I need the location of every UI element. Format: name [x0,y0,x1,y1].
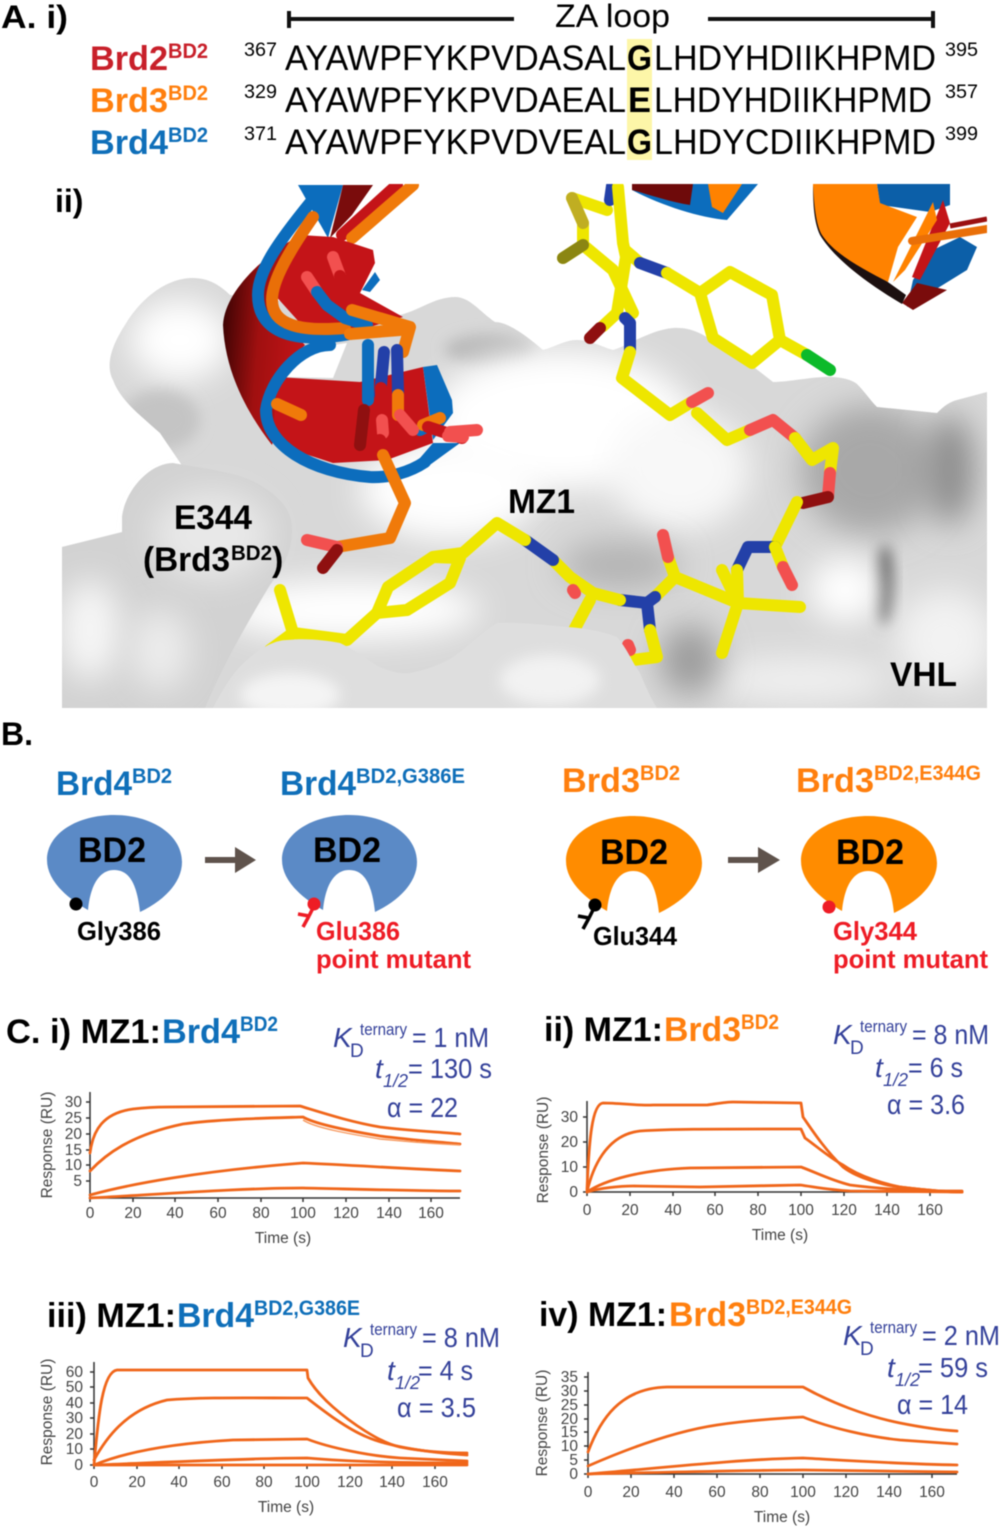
chart i: sensorgram Brd4 BD2: 20 [124,1205,142,1222]
heading: C. i) MZ1:Brd4 BD2: BD2 [240,1013,278,1036]
label: E344 (Brd3 BD2) [143,499,283,579]
panel: Brd3 BD2 E344G mutant: BD2 [836,833,904,872]
stats: chart i [333,1020,492,1123]
sequence row: Brd4: BD2 [168,124,208,147]
heading: iii) MZ1:Brd4 BD2,G386E [47,1297,360,1335]
stats: chart iv: t [887,1352,896,1383]
stats: chart i: = 130 s [408,1053,492,1084]
chart i: sensorgram Brd4 BD2: 25 [65,1110,82,1127]
label: VHL: VHL [890,656,957,694]
sequence row: Brd4 [90,123,978,162]
chart iii: sensorgram Brd4 G386E: 80 [255,1474,273,1491]
chart i: sensorgram Brd4 BD2: 120 [333,1205,359,1222]
panel: Brd4 BD2 wild type: Brd4 [56,765,132,803]
chart iii: sensorgram Brd4 G386E: 20 [66,1426,83,1443]
heading: ii) MZ1:Brd3 BD2: BD2 [741,1011,779,1034]
panel: crystal structure of MZ1 ternary complex [60,184,995,717]
label: MZ1: MZ1 [508,483,575,521]
chart iii: sensorgram Brd4 G386E: 0 [74,1457,83,1474]
chart i: sensorgram Brd4 BD2: 5 [73,1173,82,1190]
chart iv: sensorgram Brd3 E344G: 120 [833,1484,859,1501]
stats: chart iii: D [360,1341,374,1362]
chart ii: sensorgram Brd3 BD2: 20 [561,1134,578,1151]
panel: Brd4 BD2 G386E mutant [280,765,471,974]
panel label: ii): ii) [55,183,83,219]
heading: iv) MZ1:Brd3 BD2,E344G: iv) MZ1: [539,1296,667,1334]
chart iv: sensorgram Brd3 E344G: 0 [584,1484,593,1501]
chart i: sensorgram Brd4 BD2: 160 [418,1205,444,1222]
stats: chart iv: α = 14 [897,1389,968,1420]
chart iv: sensorgram Brd3 E344G: 60 [708,1484,726,1501]
stats: chart i: t [375,1053,384,1084]
chart iv: sensorgram Brd3 E344G: 0 [569,1466,578,1483]
panel: Brd4 BD2 G386E mutant: BD2 [313,831,381,870]
chart ii: sensorgram Brd3 BD2: Response (RU) [535,1097,552,1203]
panel: Brd3 BD2 wild type: Brd3 [562,762,640,800]
chart ii: sensorgram Brd3 BD2: 140 [874,1202,900,1219]
panel: Brd4 BD2 wild type: BD2 [78,831,146,870]
E344 surface lump [62,462,276,682]
stats: chart iii: ternary [370,1320,417,1339]
sequence row: Brd3 [90,81,978,120]
chart i: sensorgram Brd4 BD2: 40 [166,1205,184,1222]
stats: chart ii: ternary [860,1017,907,1036]
panel: Brd3 BD2 wild type: BD2 [600,833,668,872]
heading: iii) MZ1:Brd4 BD2,G386E: BD2,G386E [254,1297,360,1320]
chart iii: sensorgram Brd4 G386E: 50 [66,1379,83,1396]
stats: chart iii: 1/2 [395,1373,420,1393]
heading: C. i) MZ1:Brd4 BD2: Brd4 [162,1013,240,1051]
label: E344 (Brd3 BD2): BD2 [231,542,272,565]
chart i: sensorgram Brd4 BD2: 10 [65,1157,82,1174]
label: E344 (Brd3 BD2): ) [272,541,283,579]
chart iii: sensorgram Brd4 G386E: 40 [66,1395,83,1412]
sequence row: Brd3: Brd3 [90,82,168,120]
stats: chart iii: = 4 s [418,1355,473,1386]
chart iii: sensorgram Brd4 G386E [39,1359,467,1516]
chart iv: sensorgram Brd3 E344G [534,1369,957,1526]
chart ii: sensorgram Brd3 BD2: 60 [706,1202,724,1219]
heading: iv) MZ1:Brd3 BD2,E344G: BD2,E344G [746,1296,852,1319]
chart ii: sensorgram Brd3 BD2: 160 [917,1202,943,1219]
stats: chart iii: = 8 nM [422,1322,500,1353]
sequence row: Brd2: LHDYHDIIKHPMD [654,39,936,78]
chart i: sensorgram Brd4 BD2: 60 [209,1205,227,1222]
heading: iv) MZ1:Brd3 BD2,E344G: Brd3 [669,1296,746,1334]
panel label: A. i): A. i) [1,0,68,35]
chart ii: sensorgram Brd3 BD2: 80 [749,1202,767,1219]
chart iii: sensorgram Brd4 G386E: 40 [170,1474,188,1491]
chart i: sensorgram Brd4 BD2: 30 [65,1094,82,1111]
panel: Brd4 BD2 wild type: Gly386 [77,916,161,946]
chart iv: sensorgram Brd3 E344G: 80 [751,1484,769,1501]
stats: chart ii: = 6 s [908,1052,963,1083]
chart iv: sensorgram Brd3 E344G: 20 [622,1484,640,1501]
heading: iii) MZ1:Brd4 BD2,G386E: Brd4 [177,1297,254,1335]
stats: chart iv: 1/2 [895,1370,920,1390]
chart iv: sensorgram Brd3 E344G: 20 [561,1411,578,1428]
panel: Brd3 BD2 E344G mutant: Gly344 [833,916,918,946]
chart iii: sensorgram Brd4 G386E: Response (RU) [39,1359,56,1465]
chart ii: sensorgram Brd3 BD2: 30 [561,1109,578,1126]
sequence row: Brd3: BD2 [168,82,208,105]
chart ii: sensorgram Brd3 BD2: 10 [561,1159,578,1176]
chart i: sensorgram Brd4 BD2: 100 [290,1205,316,1222]
stats: chart iv: K [843,1320,863,1351]
sequence row: Brd4: LHDYCDIIKHPMD [654,123,936,162]
chart iv: sensorgram Brd3 E344G: 160 [919,1484,945,1501]
panel: Brd3 BD2 wild type [562,762,702,951]
chart ii: sensorgram Brd3 BD2: 120 [831,1202,857,1219]
chart i: sensorgram Brd4 BD2 [39,1092,460,1247]
highlight: conserved residue column [627,39,652,160]
label: E344 (Brd3 BD2): E344 [174,499,252,537]
chart ii: sensorgram Brd3 BD2 [535,1097,962,1244]
chart i: sensorgram Brd4 BD2: 80 [252,1205,270,1222]
panel: Brd4 BD2 G386E mutant: Glu386 [316,916,400,946]
foreground surface lump [234,626,654,708]
stats: chart ii: α = 3.6 [887,1089,965,1120]
chart iii: sensorgram Brd4 G386E: 10 [66,1441,83,1458]
VHL surface [62,278,995,708]
top centre helix [632,184,758,220]
sequence row: Brd3: E [628,81,651,120]
stats: chart ii: D [850,1038,864,1059]
chart iii: sensorgram Brd4 G386E: 120 [337,1474,363,1491]
sequence row: Brd4: Brd4 [90,124,168,162]
panel: Brd3 BD2 wild type: BD2 [640,762,680,785]
sequence row: Brd3: 329 [244,82,277,103]
panel: Brd3 BD2 E344G mutant: BD2,E344G [874,762,981,785]
stats: chart iv: D [860,1339,874,1360]
chart iv: sensorgram Brd3 E344G: 140 [876,1484,902,1501]
stats: chart i: D [350,1041,364,1062]
panel: Brd3 BD2 wild type: Glu344 [593,921,678,951]
heading: iv) MZ1:Brd3 BD2,E344G [539,1296,852,1334]
arrow: Brd3 to mutant [728,847,780,873]
label: E344 (Brd3 BD2): (Brd3 [143,541,230,579]
chart ii: sensorgram Brd3 BD2: 0 [583,1202,592,1219]
chart iii: sensorgram Brd4 G386E: 160 [422,1474,448,1491]
panel: Brd4 BD2 wild type: BD2 [132,765,172,788]
panel: Brd4 BD2 wild type [47,765,182,946]
stats: chart ii [833,1017,989,1120]
chart iii: sensorgram Brd4 G386E: 0 [90,1474,99,1491]
stats: chart iv: ternary [870,1318,917,1337]
stats: chart i: = 1 nM [412,1022,489,1053]
sequence row: Brd2: BD2 [168,40,208,63]
MZ1 molecule sticks [270,186,833,660]
sequence row: Brd2: Brd2 [90,40,168,78]
chart ii: sensorgram Brd3 BD2: 20 [621,1202,639,1219]
Glu344 orange sidechain [307,455,405,568]
stats: chart iii [343,1320,500,1423]
chart iii: sensorgram Brd4 G386E: 100 [294,1474,320,1491]
sequence row: Brd2: AYAWPFYKPVDASAL [285,39,626,78]
chart iv: sensorgram Brd3 E344G: 100 [790,1484,816,1501]
chart i: sensorgram Brd4 BD2: Response (RU) [39,1092,56,1198]
arrow: Brd4 to mutant [205,847,256,873]
stats: chart i: K [333,1022,353,1053]
panel: Brd4 BD2 G386E mutant: point mutant [316,944,471,974]
heading: C. i) MZ1:Brd4 BD2 [6,1013,278,1051]
heading: C. i) MZ1:Brd4 BD2: C. i) MZ1: [6,1013,161,1051]
stats: chart iii: α = 3.5 [397,1392,476,1423]
chart iv: sensorgram Brd3 E344G: 5 [569,1452,578,1469]
chart iii: sensorgram Brd4 G386E: 30 [66,1410,83,1427]
stats: chart iv: = 59 s [918,1352,988,1383]
sequence row: Brd4: G [627,123,652,162]
panel: Brd3 BD2 E344G mutant [796,762,988,974]
chart iv: sensorgram Brd3 E344G: 25 [561,1397,578,1414]
stats: chart iii: t [387,1355,396,1386]
chart iii: sensorgram Brd4 G386E: 60 [213,1474,231,1491]
panel: Brd3 BD2 E344G mutant: Brd3 [796,762,874,800]
chart iv: sensorgram Brd3 E344G: 15 [561,1424,578,1441]
chart ii: sensorgram Brd3 BD2: 100 [788,1202,814,1219]
sequence row: Brd2: 395 [945,40,978,61]
chart iii: sensorgram Brd4 G386E: 20 [128,1474,146,1491]
sequence row: Brd3: 357 [945,82,978,103]
stats: chart iv [843,1318,1000,1420]
chart iv: sensorgram Brd3 E344G: 35 [561,1369,578,1386]
chart iv: sensorgram Brd3 E344G: 40 [665,1484,683,1501]
chart i: sensorgram Brd4 BD2: Time (s) [255,1230,311,1247]
chart iii: sensorgram Brd4 G386E: Time (s) [258,1499,314,1516]
top right helix [813,184,987,310]
heading: iii) MZ1:Brd4 BD2,G386E: iii) MZ1: [47,1297,176,1335]
chart iv: sensorgram Brd3 E344G: Time (s) [754,1509,810,1526]
ZA loop bracket [289,0,933,34]
chart iii: sensorgram Brd4 G386E: 60 [66,1364,83,1381]
sidechain sticks on helix [307,257,477,452]
chart iv: sensorgram Brd3 E344G: 10 [561,1438,578,1455]
chart i: sensorgram Brd4 BD2: 0 [86,1205,95,1222]
stats: chart i: ternary [360,1020,407,1039]
chart i: sensorgram Brd4 BD2: 140 [376,1205,402,1222]
sequence row: Brd4: AYAWPFYKPVDVEAL [285,123,626,162]
sequence row: Brd4: 371 [244,124,277,145]
panel: Brd3 BD2 E344G mutant: point mutant [833,944,988,974]
stats: chart ii: K [833,1019,853,1050]
sequence row: Brd2: 367 [244,40,277,61]
stats: chart ii: = 8 nM [912,1019,989,1050]
chart iv: sensorgram Brd3 E344G: 30 [561,1383,578,1400]
sequence row: Brd3: LHDYHDIIKHPMD [654,81,932,120]
chart iv: sensorgram Brd3 E344G: Response (RU) [534,1370,551,1476]
heading: ii) MZ1:Brd3 BD2: Brd3 [664,1011,741,1049]
chart i: sensorgram Brd4 BD2: 15 [65,1142,82,1159]
chart ii: sensorgram Brd3 BD2: 40 [664,1202,682,1219]
heading: ii) MZ1:Brd3 BD2 [544,1011,779,1049]
sequence row: Brd2: G [627,39,652,78]
stats: chart i: 1/2 [383,1071,408,1091]
panel: Brd4 BD2 G386E mutant: BD2,G386E [356,765,465,788]
sequence row: Brd4: 399 [945,124,978,145]
chart iii: sensorgram Brd4 G386E: 140 [379,1474,405,1491]
chart i: sensorgram Brd4 BD2: 20 [65,1126,82,1143]
sequence row: Brd2 [90,39,978,78]
chart ii: sensorgram Brd3 BD2: Time (s) [752,1227,808,1244]
helix: overlaid BD2 ribbons (left) [223,185,460,477]
heading: ii) MZ1:Brd3 BD2: ii) MZ1: [544,1011,663,1049]
panel label: B.: B. [1,716,33,752]
stats: chart ii: t [875,1052,884,1083]
panel: Brd4 BD2 G386E mutant: Brd4 [280,765,356,803]
sequence row: Brd3: AYAWPFYKPVDAEAL [285,81,626,120]
chart ii: sensorgram Brd3 BD2: 0 [569,1184,578,1201]
stats: chart ii: 1/2 [883,1070,908,1090]
stats: chart iii: K [343,1322,363,1353]
stats: chart i: α = 22 [387,1092,458,1123]
